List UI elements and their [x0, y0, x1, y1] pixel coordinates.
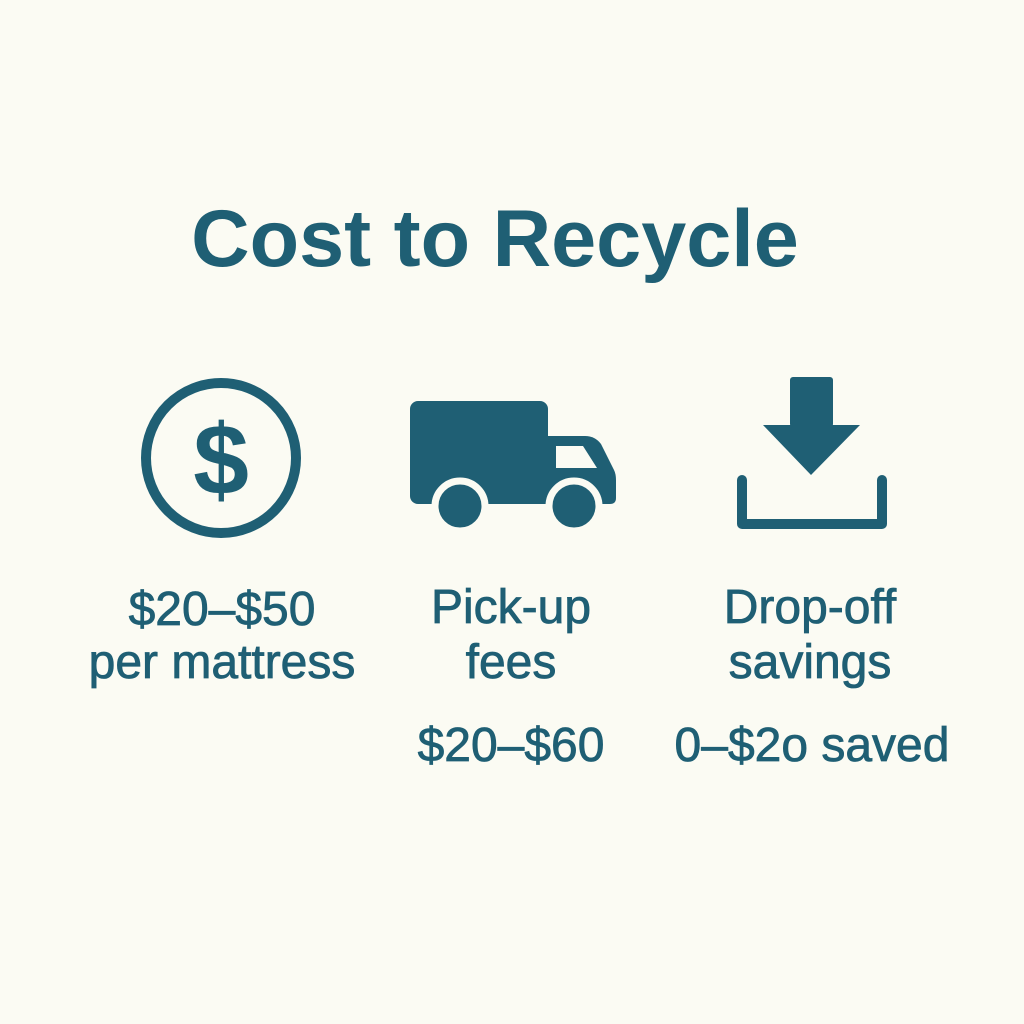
text: drop-off savings: Drop-off: [724, 581, 897, 634]
text: drop-off savings: 0–$2o saved: [675, 719, 949, 772]
text: cost per mattress: per mattress: [89, 636, 355, 689]
text: pick-up fees: Pick-up: [431, 581, 591, 634]
text: cost per mattress: $20–$50: [129, 583, 315, 636]
text: drop-off savings: [675, 581, 949, 772]
text: drop-off savings: savings: [729, 636, 891, 689]
text: pick-up fees: $20–$60: [418, 719, 604, 772]
title: Cost to Recycle: [191, 194, 799, 284]
icon: dollar circle: $: [193, 404, 249, 516]
text: pick-up fees: fees: [466, 636, 556, 689]
text: pick-up fees: [418, 581, 604, 772]
text: cost per mattress: [89, 583, 355, 689]
icon: download: [742, 377, 882, 524]
icon: truck: [410, 401, 616, 531]
icon: dollar circle: [146, 383, 296, 533]
